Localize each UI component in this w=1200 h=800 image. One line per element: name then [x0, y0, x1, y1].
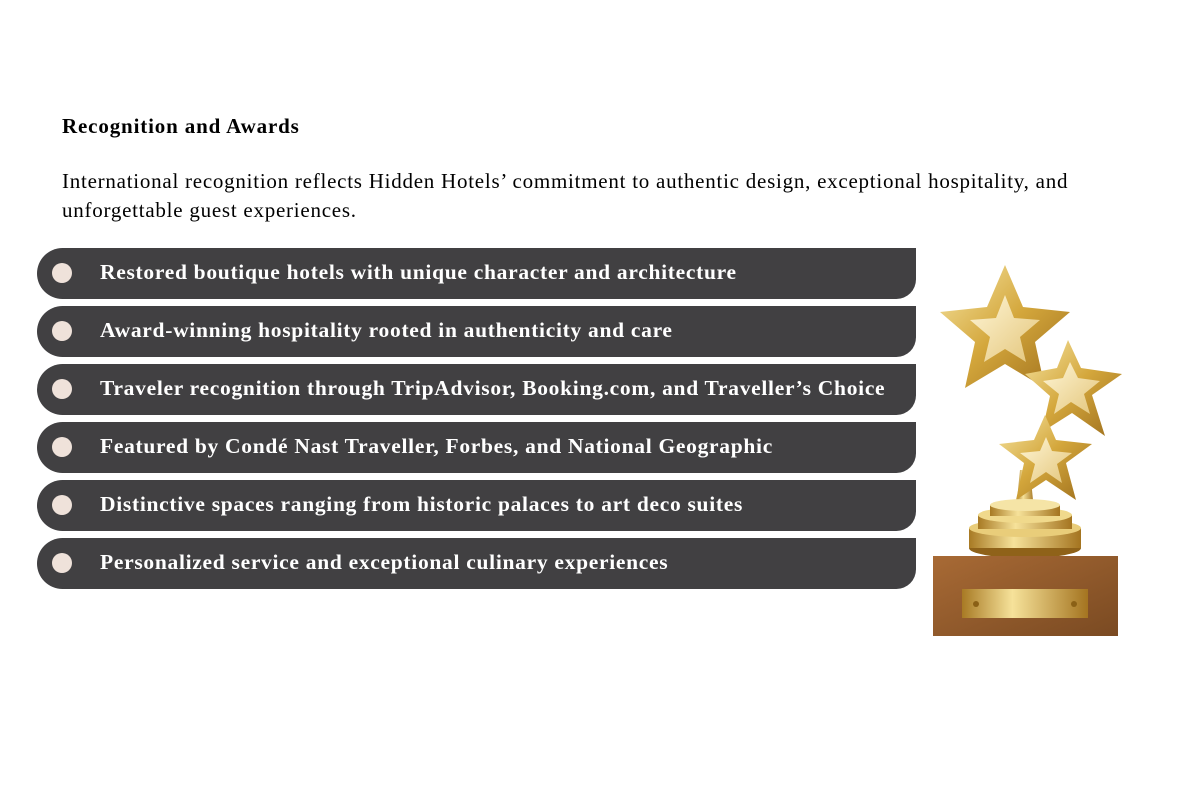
- bar 2: [37, 306, 916, 357]
- stem: [1016, 470, 1034, 510]
- star large: [940, 265, 1070, 388]
- bar 3: Traveler recognition through TripAdvisor, Booking.com, and Traveller’s Choice: [100, 376, 885, 400]
- bar 1: [37, 248, 916, 299]
- bar 5: [37, 480, 916, 531]
- bar 4: [37, 422, 916, 473]
- intro text: International recognition reflects Hidden Hotels’ commitment to authentic design, exceptional hospitality, and unforgettable guest experiences.: [62, 169, 1068, 222]
- bar 2: Award-winning hospitality rooted in authenticity and care: [100, 318, 673, 342]
- title: Recognition and Awards: [62, 114, 300, 138]
- bar 3: [37, 364, 916, 415]
- bar 5: Distinctive spaces ranging from historic palaces to art deco suites: [100, 492, 743, 516]
- bar 6: [37, 538, 916, 589]
- star small: [999, 415, 1092, 500]
- star medium: [1025, 340, 1122, 436]
- bar 6: Personalized service and exceptional culinary experiences: [100, 550, 668, 574]
- bar 1: Restored boutique hotels with unique character and architecture: [100, 260, 737, 284]
- pedestal tiers: [969, 538, 1081, 558]
- bar 4: Featured by Condé Nast Traveller, Forbes, and National Geographic: [100, 434, 773, 458]
- wooden base: [933, 556, 1118, 636]
